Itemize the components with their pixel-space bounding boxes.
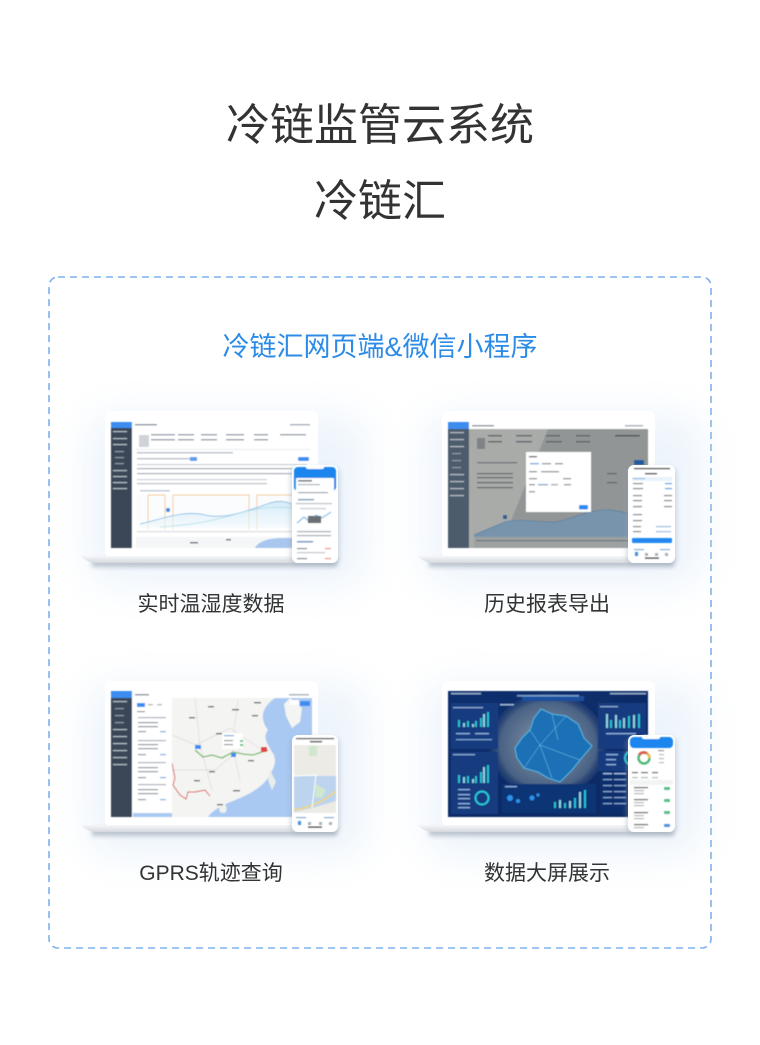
card: GPRS track query xyxy=(80,681,365,885)
phone 3 xyxy=(290,735,340,834)
laptop 3 xyxy=(80,681,343,836)
caption: 数据大屏展示 xyxy=(484,862,610,885)
caption: GPRS轨迹查询 xyxy=(139,862,283,885)
screen: track map xyxy=(111,691,312,817)
laptop 2 xyxy=(417,411,680,567)
screen: realtime dashboard xyxy=(111,422,312,548)
card: big screen display xyxy=(417,681,702,885)
trip list xyxy=(133,698,172,817)
screen: report dialog over dimmed page xyxy=(448,422,648,548)
panel heading: 冷链汇网页端&微信小程序 xyxy=(222,332,538,362)
right panels xyxy=(598,703,646,814)
bottom centre panel xyxy=(502,784,596,813)
title: 冷链监管云系统 xyxy=(226,101,534,150)
laptop 1 xyxy=(80,411,343,567)
caption: 历史报表导出 xyxy=(484,593,610,616)
laptop 4 xyxy=(417,681,680,836)
line chart with threshold outline xyxy=(137,495,307,532)
map xyxy=(172,698,312,817)
left upper panel xyxy=(451,703,498,749)
card: realtime data xyxy=(80,411,365,616)
phone 2 xyxy=(626,465,677,565)
phone 1 xyxy=(290,465,340,565)
card: history report export xyxy=(417,411,702,616)
subtitle: product name: 冷链汇 xyxy=(314,177,446,226)
dialog xyxy=(526,452,591,512)
screen: dark dashboard xyxy=(448,691,648,817)
left lower panel xyxy=(451,752,498,814)
panel: dashed container xyxy=(49,277,711,948)
caption: 实时温湿度数据 xyxy=(138,593,284,616)
phone 4 xyxy=(626,735,677,834)
